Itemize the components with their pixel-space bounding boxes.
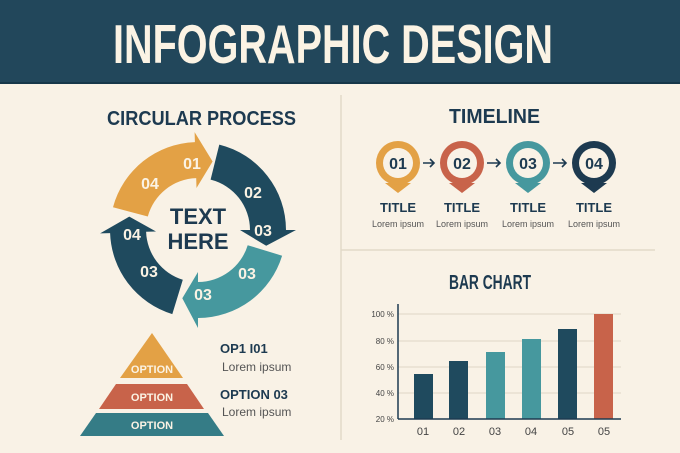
bar chart: 05 [562,426,574,438]
option text: Lorem ipsum [222,405,291,419]
heading: timeline: TIMELINE [449,106,540,128]
timeline: Lorem ipsum [502,219,554,229]
step labels: 01 [183,156,201,173]
heading: circular process: CIRCULAR PROCESS [107,108,296,130]
arrow: navy right [211,145,296,246]
option text: OP1 I01 [220,341,268,356]
circular process diagram [100,132,296,328]
timeline: 04 [585,156,603,173]
timeline: Lorem ipsum [436,219,488,229]
option text: Lorem ipsum [222,360,291,374]
timeline: Lorem ipsum [372,219,424,229]
step labels: 02 [244,185,262,202]
timeline [372,141,620,229]
timeline: TITLE [510,200,546,215]
bar chart [371,304,621,438]
bar chart: 20 % [376,415,394,424]
option text [220,341,291,419]
bar chart: 05 [598,426,610,438]
bar chart: 100 % [371,310,394,319]
bar chart: 60 % [376,363,394,372]
bar chart: 04 [525,426,537,438]
timeline: 02 [453,156,471,173]
header banner [0,0,680,84]
timeline: TITLE [444,200,480,215]
timeline: TITLE [576,200,612,215]
timeline: 01 [389,156,407,173]
timeline: TITLE [380,200,416,215]
step labels: 04 [123,227,141,244]
pyramid: OPTION [131,364,173,376]
pyramid: OPTION [131,392,173,404]
arrow: teal [182,245,282,328]
arrow: navy left [100,217,183,314]
pyramid [80,333,224,436]
center text: TEXT [170,204,227,229]
bar chart: 03 [489,426,501,438]
circular process diagram: HERE [167,229,229,254]
step labels: 03 [238,266,256,283]
timeline: 03 [519,156,537,173]
timeline: Lorem ipsum [568,219,620,229]
step labels: 03 [194,287,212,304]
pyramid: OPTION [131,420,173,432]
step labels: 03 [254,223,272,240]
step labels: 04 [141,176,159,193]
option text: OPTION 03 [220,387,288,402]
bar chart: 80 % [376,337,394,346]
heading: bar chart: BAR CHART [449,272,531,294]
bar chart: 40 % [376,389,394,398]
bar chart: 01 [417,426,429,438]
step labels: 03 [140,264,158,281]
bar chart: 02 [453,426,465,438]
step labels [123,156,272,304]
arrow: orange [113,132,213,216]
